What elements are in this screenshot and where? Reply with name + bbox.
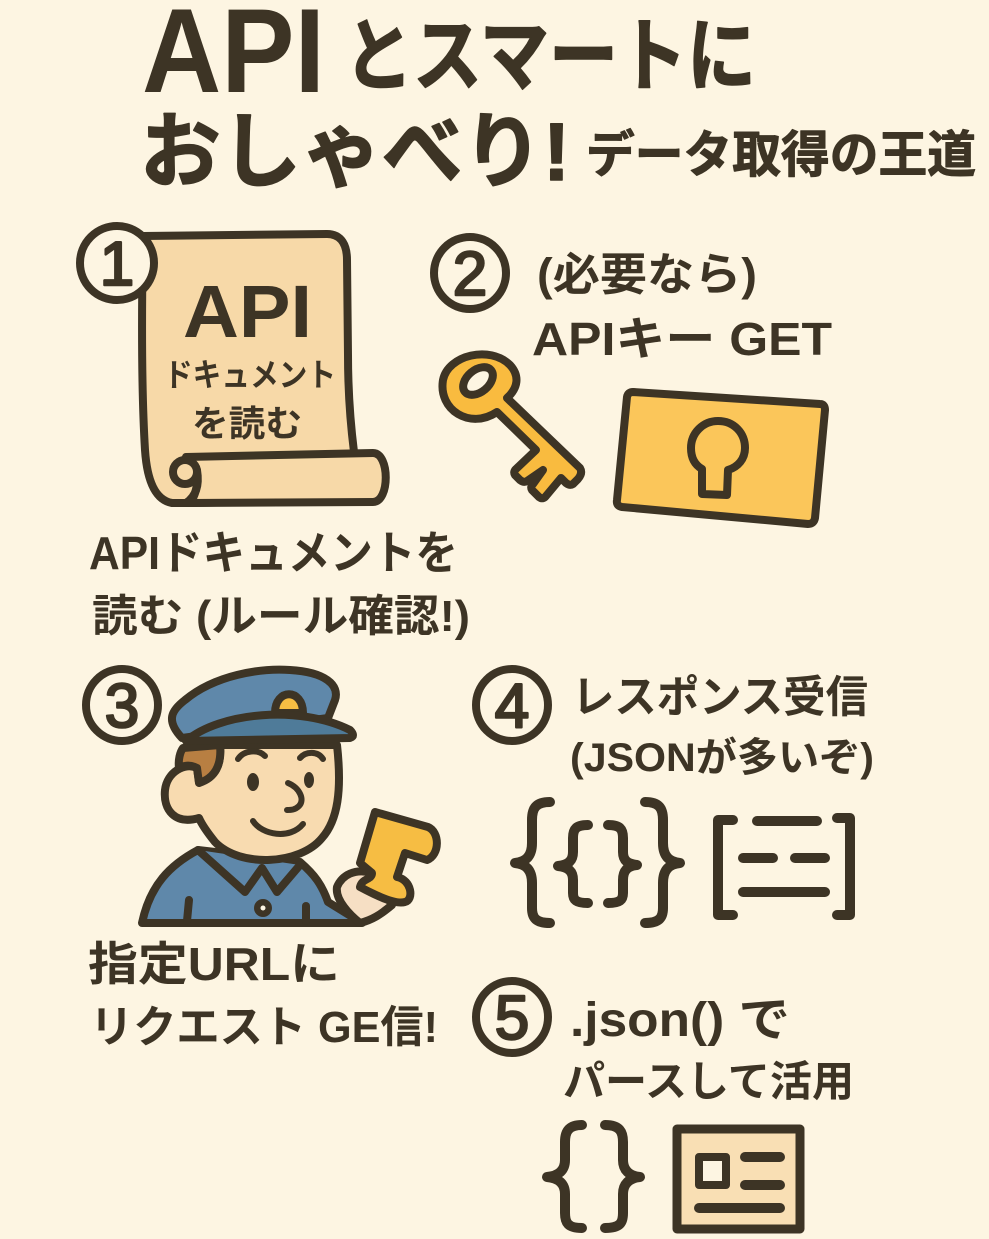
icon: scroll: API xyxy=(183,270,312,353)
uniform xyxy=(142,850,362,923)
step 5 caption xyxy=(563,994,854,1105)
icon: json braces xyxy=(515,802,680,923)
number badge 4 xyxy=(476,669,548,741)
panel: step 2 xyxy=(434,237,832,524)
icon: scroll xyxy=(142,234,386,503)
step 2 caption: (必要なら) xyxy=(537,249,757,300)
step 4 caption xyxy=(570,673,874,780)
icon: curly braces xyxy=(547,1125,640,1228)
title xyxy=(140,0,976,198)
number badge 2: 2 xyxy=(453,240,487,309)
number badge 1 xyxy=(80,226,154,300)
hand and card xyxy=(337,812,437,923)
number badge 5: 5 xyxy=(495,984,529,1053)
title: おしゃべり! xyxy=(140,107,570,198)
panel: step 1 xyxy=(80,226,470,641)
number badge 4: 4 xyxy=(495,672,529,741)
panel: step 4 xyxy=(476,669,874,923)
step 1 caption xyxy=(89,527,470,641)
cap xyxy=(172,670,353,741)
icon: key xyxy=(442,354,581,498)
number badge 2 xyxy=(434,237,506,309)
step 4 caption: レスポンス受信 xyxy=(572,673,868,722)
step 3 caption: 指定URLに xyxy=(88,938,340,990)
icon: officer xyxy=(142,670,437,923)
number badge 5 xyxy=(476,981,548,1053)
title: データ取得の王道 xyxy=(586,127,976,183)
step 5 caption: パースして活用 xyxy=(563,1058,854,1105)
number badge 3: 3 xyxy=(105,672,139,741)
step 3 caption: リクエスト GE信! xyxy=(90,1003,438,1052)
panel: step 3 xyxy=(86,669,438,1052)
step 3 caption xyxy=(88,938,438,1052)
step 4 caption: (JSONが多いぞ) xyxy=(570,736,874,780)
step 2 caption xyxy=(532,249,832,365)
icon: document xyxy=(677,1129,800,1229)
step 1 caption: 読む (ルール確認!) xyxy=(92,592,470,641)
icon: lock card xyxy=(617,392,825,524)
title: とスマートに xyxy=(344,12,756,101)
panel: step 5 xyxy=(476,981,854,1229)
step 5 caption: .json() で xyxy=(570,994,790,1047)
step 1 caption: APIドキュメントを xyxy=(89,527,458,579)
number badge 1: 1 xyxy=(100,230,134,299)
step 2 caption: APIキー GET xyxy=(532,313,832,365)
head xyxy=(165,745,339,860)
number badge 3 xyxy=(86,669,158,741)
icon: scroll: を読む xyxy=(192,403,302,444)
icon: scroll: ドキュメント xyxy=(164,357,336,393)
icon: json array xyxy=(718,818,850,915)
